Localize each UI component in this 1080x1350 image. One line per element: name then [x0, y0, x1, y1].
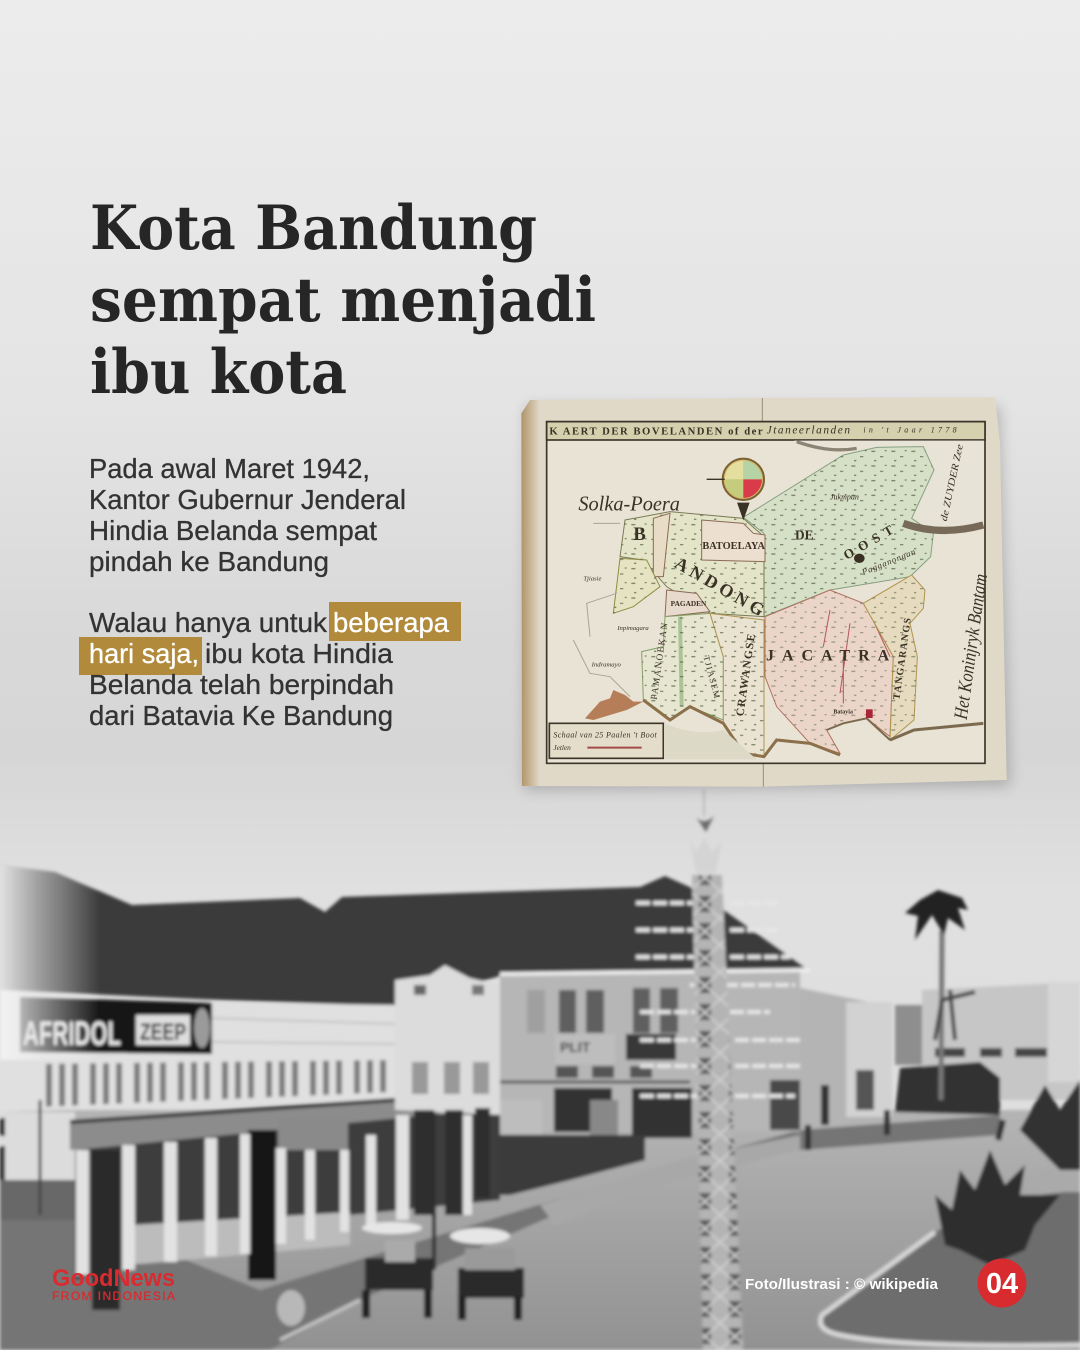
region: Bandung [620, 512, 764, 617]
white building with balustrade [0, 997, 395, 1220]
title: ibu kota [90, 337, 347, 408]
left light leak [0, 865, 100, 1060]
region: Pamanoekan [642, 613, 723, 720]
palm tree [905, 890, 975, 1100]
region names: Inpimagara [616, 625, 649, 632]
rickshaw carts [277, 1222, 524, 1326]
logo: GoodNews from Indonesia: GoodNews [52, 1265, 175, 1292]
region: Krawang [710, 613, 764, 757]
advert banner [20, 997, 212, 1054]
advert banner: AFRIDOL [23, 1015, 121, 1053]
road and ground [0, 1110, 1080, 1350]
logo: GoodNews from Indonesia: FROM INDONESIA [52, 1289, 175, 1303]
photo credit: Foto/Ilustrasi : © wikipedia [745, 1276, 939, 1293]
paragraph two with highlights [79, 602, 461, 731]
wind rose [707, 459, 764, 518]
region names: TJIASEM [701, 655, 723, 701]
corner office building [500, 970, 810, 1195]
region: Pagaden [665, 590, 710, 617]
region names: B [633, 524, 646, 545]
paragraph two with highlights: Belanda telah berpindah [89, 669, 394, 700]
title: sempat menjadi [90, 265, 596, 336]
region: Tangerang [863, 575, 925, 740]
roofs [0, 865, 805, 1006]
distant buildings [800, 982, 1080, 1130]
scale box [549, 723, 663, 758]
region names: OOST [841, 519, 901, 563]
paragraph one: Kantor Gubernur Jenderal [89, 484, 406, 515]
lattice tower [690, 790, 743, 1350]
title [90, 193, 596, 408]
region names: TANGARANGS [891, 616, 914, 700]
region names [578, 443, 992, 722]
paragraph two with highlights: Walau hanya untuk [89, 607, 328, 638]
map frame [547, 422, 985, 763]
title: Kota Bandung [90, 193, 537, 264]
scale box: Schaal van 25 Paalen 't Boot [553, 730, 657, 739]
colonnade [70, 1020, 500, 1310]
region names: Jukmpan [830, 492, 859, 501]
paragraph two with highlights: hari saja, [89, 638, 199, 669]
paragraph one: Pada awal Maret 1942, [89, 453, 370, 484]
region names: Indramayo [591, 662, 622, 669]
river mouth and coastline [643, 442, 983, 757]
region: Jacatra [765, 590, 893, 753]
street garlands [636, 903, 800, 1096]
map shadow [524, 406, 1010, 790]
scale box: Jetlen [553, 743, 571, 752]
region names: Batavia [833, 709, 853, 715]
ornate corner building [395, 965, 502, 1215]
region names: PAGADEN [671, 599, 707, 608]
region names: BATOELAYA [702, 541, 766, 552]
paragraph one: pindah ke Bandung [89, 546, 329, 577]
antique map [521, 397, 1007, 787]
page number badge: 04 [986, 1268, 1018, 1300]
antique map: in 't Jaar 1778 [863, 426, 957, 435]
region: Batoelaya [702, 520, 765, 562]
highlight: hari saja [79, 637, 202, 675]
region names: JACATRA [766, 648, 897, 665]
mountains [585, 690, 643, 720]
region names: CRAWANGSE [734, 632, 758, 717]
inland rivers [573, 523, 630, 697]
photo: Bandung street scene [0, 790, 1080, 1350]
paragraph one: Hindia Belanda sempat [89, 515, 377, 546]
region: Ciasem [613, 558, 660, 613]
corner office building: PLIT [560, 1039, 591, 1055]
antique map: Jtaneerlanden [767, 424, 850, 436]
paragraph two with highlights: ibu kota Hindia [205, 638, 393, 669]
paragraph two with highlights: beberapa [333, 607, 449, 638]
shrubs and fence [500, 1135, 645, 1195]
region: De Oost [743, 447, 934, 617]
parchment [521, 397, 1007, 787]
highlight: beberapa [329, 602, 461, 641]
region names: de ZUYDER Zee [939, 443, 966, 522]
sea region left [664, 723, 757, 759]
sea at the top [793, 441, 984, 533]
region names: Het Koninjryk Bantam [951, 573, 992, 722]
paragraph one [89, 453, 406, 577]
paragraph two with highlights: dari Batavia Ke Bandung [89, 700, 393, 731]
region names: ANDONG [671, 553, 771, 622]
map title: K AERT DER BOVELANDEN of der [549, 427, 763, 438]
advert banner: ZEEP [140, 1019, 186, 1046]
region names: DE [795, 527, 814, 542]
region names: Solka-Poera [578, 494, 680, 516]
region names: Tjiasie [583, 576, 602, 583]
traffic island and bushes [808, 1080, 1080, 1346]
region names: PAMANOEKAN [650, 621, 671, 700]
page number badge [978, 1258, 1026, 1308]
capital marker [866, 709, 873, 718]
region names: Pagganongan [859, 546, 917, 577]
